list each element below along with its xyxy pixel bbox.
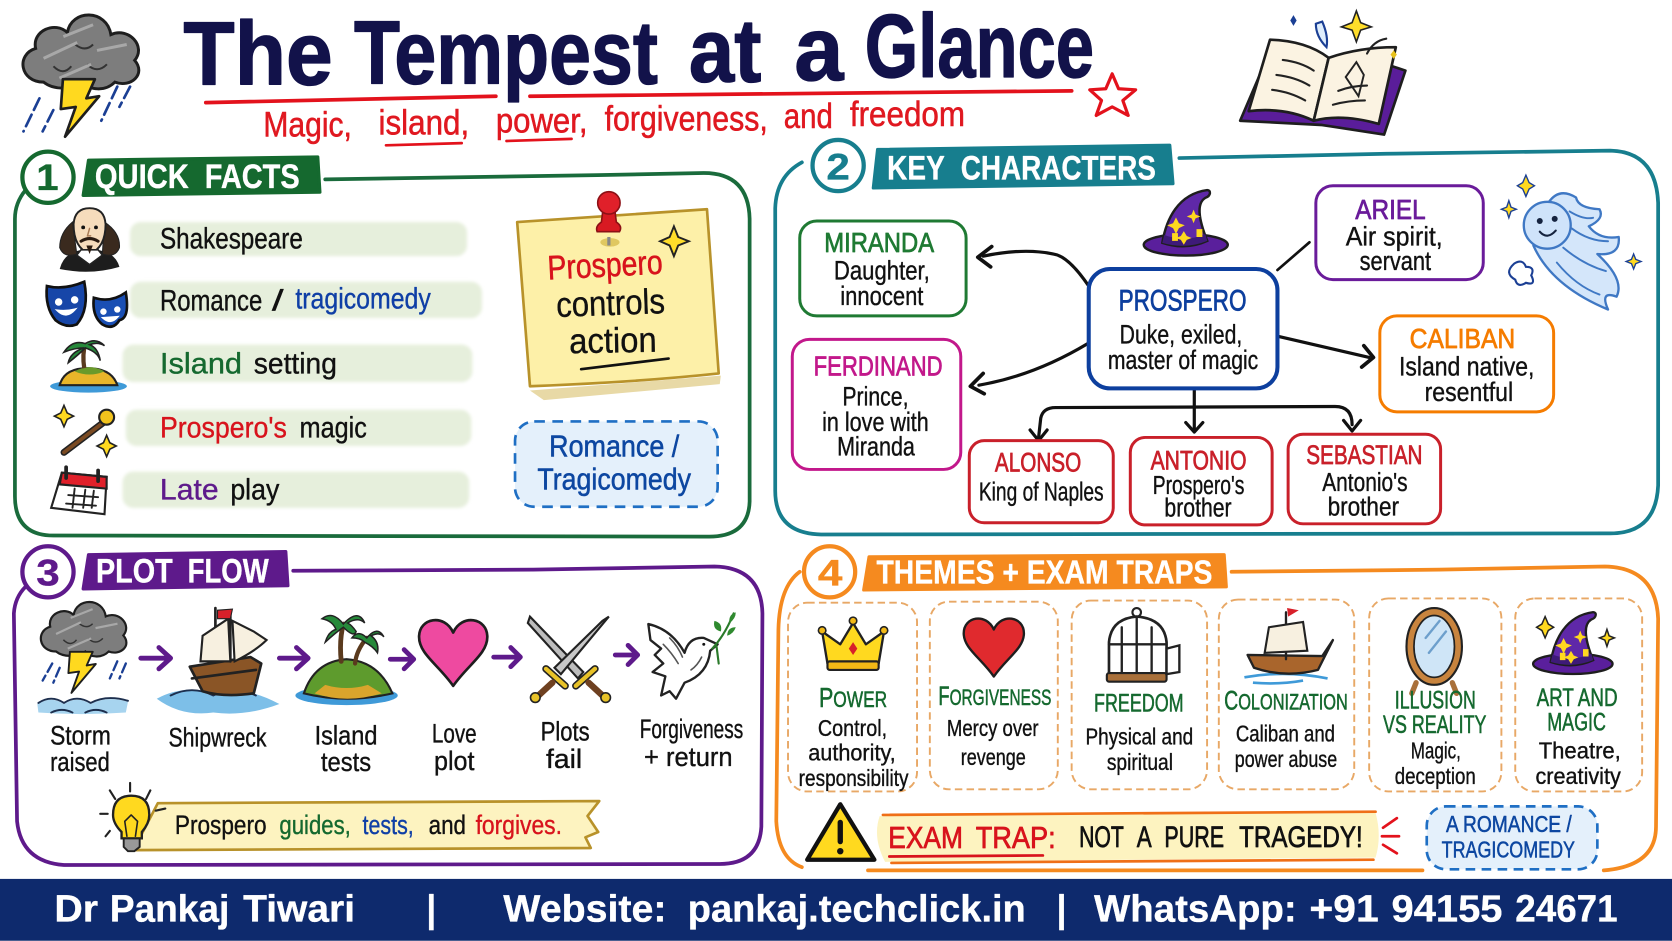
footer bar: pankaj.techclick.in [688,888,1026,931]
subtitle: power, [496,101,588,140]
icon: shakespeare portrait [60,208,119,272]
box: antonio: brother [1164,494,1232,522]
banner: prospero guides: Prospero [175,810,267,840]
card: art and magic: Theatre, [1539,737,1621,763]
icon: pin [597,192,621,247]
icon: open book [1240,11,1405,135]
title: Tempest [354,2,658,102]
box: alonso: King of Naples [979,478,1104,506]
heading: plot flow [83,552,288,590]
icon: open birdcage [1107,608,1179,682]
panel 1: quick facts [15,152,750,537]
badge 1: 1 [36,156,59,198]
card: forgiveness: revenge [961,744,1026,770]
footer bar: WhatsApp: [1094,888,1297,931]
step labels: Plots [541,716,590,746]
box: prospero: PROSPERO [1119,285,1247,318]
box: ferdinand: Prince, [842,381,909,411]
card: power: POWER [819,682,887,713]
row 3 [123,345,472,382]
card: art and magic: creativity [1536,763,1621,789]
callout: romance tragicomedy [515,421,718,507]
callout: a romance tragicomedy: TRAGICOMEDY [1442,837,1575,863]
icon: magic wand [54,405,116,457]
row 1: Shakespeare [160,223,303,256]
subtitle [263,95,965,145]
icon: mirror [1406,608,1462,693]
box: ariel: ARIEL [1355,194,1426,225]
callout: a romance tragicomedy: A ROMANCE / [1446,811,1572,837]
box: ariel: servant [1360,246,1431,276]
card: power: responsibility [799,765,909,791]
footer bar: 24671 [1515,888,1618,931]
banner: prospero guides: guides, [279,810,351,840]
panel 2: key characters [775,140,1658,534]
arrows: connections from prospero [970,242,1373,441]
box: sebastian: Antonio's [1322,469,1408,497]
subtitle: forgiveness, [605,99,768,138]
title: a [794,0,845,99]
title underline [206,91,1072,103]
banner: prospero guides: and [429,810,466,840]
card: colonization [1219,600,1354,789]
row 3: Island [160,347,242,380]
card: forgiveness: Mercy over [947,715,1039,741]
card: forgiveness: FORGIVENESS [938,681,1051,711]
card: freedom: spiritual [1107,749,1173,775]
footer bar: Pankaj [110,888,229,931]
icon: storm [37,602,128,714]
box: caliban: CALIBAN [1410,323,1515,354]
heading: key characters: KEY [887,149,945,187]
subtitle: Magic, [263,106,352,145]
arrow [390,650,414,669]
subtitle: island, [379,104,469,143]
heading: plot flow: PLOT [96,552,173,590]
footer bar: | [1057,888,1066,931]
panel 4: themes and exam traps [776,546,1658,870]
badge 2: 2 [826,145,850,187]
box: ferdinand: in love with [822,407,929,437]
arrow [141,648,171,669]
box: prospero: Duke, exiled, [1120,320,1242,350]
card: freedom [1072,601,1207,789]
footer bar: +91 [1309,888,1379,931]
row 5: Late [160,473,219,506]
heading: key characters: CHARACTERS [961,149,1156,187]
box: antonio: Prospero's [1153,472,1244,500]
badge 4: 4 [818,552,843,594]
box: miranda: innocent [840,281,924,311]
card: art and magic: ART AND [1537,685,1618,712]
step labels: Island [315,721,377,751]
box: ariel [1316,186,1483,280]
card: power: authority, [808,740,896,766]
callout: romance tragicomedy: Romance / [549,429,680,464]
badge 3: 3 [36,552,60,594]
icon: dove with olive branch [648,612,736,699]
box: caliban: Island native, [1399,352,1534,382]
card: art and magic: MAGIC [1547,710,1606,737]
footer bar [0,879,1672,941]
subtitle: freedom [850,95,965,134]
exam trap banner: NOT [1079,821,1124,854]
row 2: / [272,285,285,318]
box: ferdinand [792,339,961,469]
arrow [494,648,520,667]
icon: crown [818,617,888,670]
icon: shipwreck [157,608,279,714]
icon: storm cloud with lightning [23,15,139,137]
callout: romance tragicomedy: Tragicomedy [537,462,691,497]
box: sebastian: SEBASTIAN [1306,440,1422,470]
banner: prospero guides: tests, [363,810,414,840]
step labels [50,714,743,777]
exam trap banner: TRAP: [976,820,1056,855]
heading: themes + exam traps: THEMES + EXAM TRAPS [877,555,1212,592]
footer bar: Tiwari [243,888,355,931]
step labels: raised [50,747,110,777]
row 2: tragicomedy [295,282,431,315]
icon: wizard hat with stars [1533,612,1614,674]
callout: a romance tragicomedy [1427,806,1597,869]
card: freedom: FREEDOM [1094,690,1184,717]
box: antonio [1130,437,1272,525]
icon: colonial ship [1244,608,1333,683]
banner: prospero guides: forgives. [476,810,562,840]
badge 1 [22,152,74,203]
box: prospero [1089,269,1277,388]
row 2: Romance [160,285,262,318]
card: illusion vs reality: Magic, [1411,737,1461,763]
box: sebastian [1288,434,1441,524]
exam trap banner: PURE [1164,821,1224,854]
sticky text: action [569,321,657,361]
badge 3 [22,546,74,597]
icon: wizard hat [1144,190,1228,256]
sticky text: Prospero [547,244,664,288]
title: at [689,0,761,100]
step labels: fail [546,744,582,774]
icon: red star [1090,74,1136,115]
row 4: magic [300,411,367,444]
icon: red heart [964,619,1024,677]
card: colonization: power abuse [1235,746,1337,772]
exam trap banner [877,812,1399,863]
arrow [279,648,308,669]
icon: pink heart [419,620,487,686]
card: colonization: COLONIZATION [1224,685,1348,715]
icon: star [660,226,689,256]
heading: quick facts: FACTS [205,158,300,196]
box: miranda: MIRANDA [824,227,935,258]
card: illusion vs reality: deception [1395,763,1476,789]
footer bar: Dr [54,888,98,931]
icon: light bulb [100,783,165,851]
card: freedom: Physical and [1086,724,1193,750]
heading: quick facts: QUICK [95,158,189,196]
box: ferdinand: FERDINAND [814,351,943,382]
card: art and magic [1515,598,1642,791]
icon: theatre masks [47,282,127,327]
step labels: Shipwreck [168,723,267,753]
heading: quick facts [83,157,320,196]
badge 2 [813,140,864,191]
box: miranda: Daughter, [834,256,930,286]
heading: plot flow: FLOW [188,552,269,590]
card: power [788,603,917,791]
sticky text [547,244,669,369]
step labels: Love [432,718,477,748]
box: miranda [800,221,966,316]
card: illusion vs reality: VS REALITY [1383,712,1486,739]
row 3: setting [254,347,337,380]
icon: island [50,341,127,393]
step labels: Forgiveness [640,714,743,744]
arrow [615,645,638,665]
icon: ariel ghost [1501,175,1641,309]
box: ferdinand: Miranda [837,432,915,462]
badge 4 [804,546,855,597]
card: power: Control, [818,715,887,741]
row 1 [130,222,467,256]
exam trap banner: EXAM [888,820,963,855]
row 2 [130,282,482,318]
heading: key characters [873,145,1173,188]
box: sebastian: brother [1328,493,1399,521]
title [183,0,1094,103]
card: forgiveness [930,602,1058,789]
step labels: Storm [50,721,111,751]
row 4: Prospero's [160,411,287,444]
box: antonio: ANTONIO [1151,445,1247,475]
box: prospero: master of magic [1108,345,1258,375]
card: illusion vs reality: ILLUSION [1395,687,1476,714]
row 4 [126,410,471,446]
footer bar: 94155 [1392,888,1502,931]
exam trap banner: TRAGEDY! [1239,821,1363,854]
card: colonization: Caliban and [1236,720,1335,746]
footer bar: Website: [503,888,666,931]
step labels: tests [321,747,371,777]
box: ariel: Air spirit, [1346,222,1443,252]
box: caliban [1380,316,1554,412]
exam trap banner: A [1137,821,1152,854]
icon: warning triangle [807,804,874,860]
step labels: + return [644,742,733,772]
row 5: play [230,473,279,506]
sticky note [517,192,721,400]
panel 3: plot flow [14,546,762,865]
icon: island with palms [295,615,398,705]
banner: prospero guides [133,801,599,850]
icon: crossed swords [528,617,610,702]
box: alonso [969,441,1113,523]
icon: calendar [51,467,107,514]
card: illusion vs reality [1369,598,1501,791]
step labels: plot [434,746,475,776]
title: The [183,3,333,103]
box: caliban: resentful [1425,377,1513,407]
sticky text: controls [556,282,666,325]
subtitle: and [784,97,833,136]
row 5 [123,472,469,508]
footer bar: | [427,888,436,931]
box: alonso: ALONSO [995,448,1081,478]
